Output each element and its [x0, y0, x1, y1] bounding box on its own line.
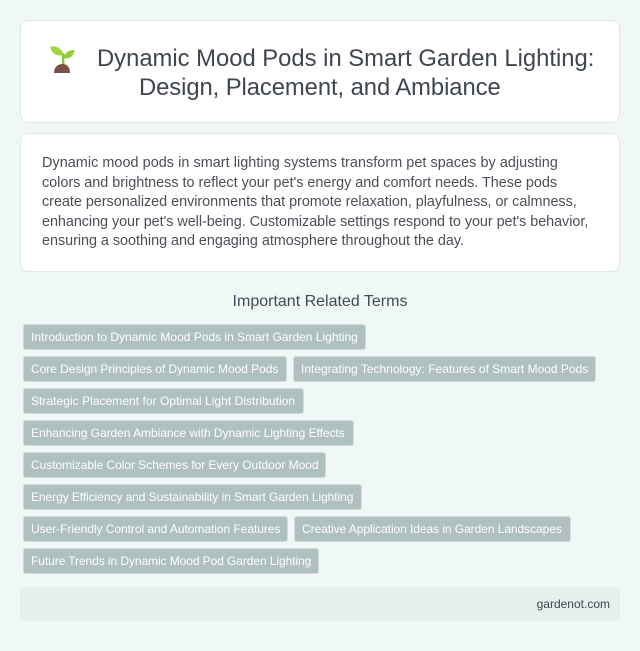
- title: Dynamic Mood Pods in Smart Garden Lighting:: [97, 45, 594, 72]
- text block: description: colors and brightness to reflect your pet's energy and comfort needs. These pods: [42, 174, 557, 190]
- tag: Energy Efficiency and Sustainability in Smart Garden Lighting: [31, 490, 353, 504]
- tag: [23, 484, 362, 510]
- text block: description: enhancing your pet's well-being. Customizable settings respond to your pet's behavior,: [42, 214, 588, 230]
- tag: Core Design Principles of Dynamic Mood Pods: [31, 362, 278, 376]
- text block: description: [42, 155, 588, 249]
- text block: description: Dynamic mood pods in smart lighting systems transform pet spaces by adjusting: [42, 155, 558, 171]
- icon: sprout: [50, 46, 74, 73]
- footer bar: [20, 587, 620, 621]
- panel: title card: [20, 20, 620, 123]
- tag: [23, 420, 354, 446]
- tag: [23, 516, 288, 542]
- tag: [23, 548, 319, 574]
- tag: [293, 356, 596, 382]
- tag: Future Trends in Dynamic Mood Pod Garden Lighting: [31, 554, 311, 568]
- heading: related terms: Important Related Terms: [233, 293, 407, 310]
- tag: Enhancing Garden Ambiance with Dynamic Lighting Effects: [31, 426, 345, 440]
- text block: description: ensuring a soothing and engaging atmosphere throughout the day.: [42, 233, 464, 249]
- tag: Integrating Technology: Features of Smart Mood Pods: [301, 362, 588, 376]
- tag: Strategic Placement for Optimal Light Distribution: [31, 394, 295, 408]
- list: related term tags: [23, 324, 596, 574]
- tag: Creative Application Ideas in Garden Landscapes: [302, 522, 562, 536]
- title: Design, Placement, and Ambiance: [139, 74, 501, 101]
- tag: [23, 388, 304, 414]
- tag: [23, 356, 287, 382]
- tag: User-Friendly Control and Automation Features: [31, 522, 280, 536]
- text block: description: create personalized environments that promote relaxation, playfulness, or calmness,: [42, 194, 577, 210]
- tag: Introduction to Dynamic Mood Pods in Smart Garden Lighting: [31, 330, 358, 344]
- panel: description card: [20, 133, 620, 272]
- tag: [23, 324, 366, 350]
- tag: [23, 452, 326, 478]
- tag: [294, 516, 571, 542]
- footer text: source: gardenot.com: [537, 597, 610, 611]
- title: [97, 45, 594, 101]
- tag: Customizable Color Schemes for Every Outdoor Mood: [31, 458, 318, 472]
